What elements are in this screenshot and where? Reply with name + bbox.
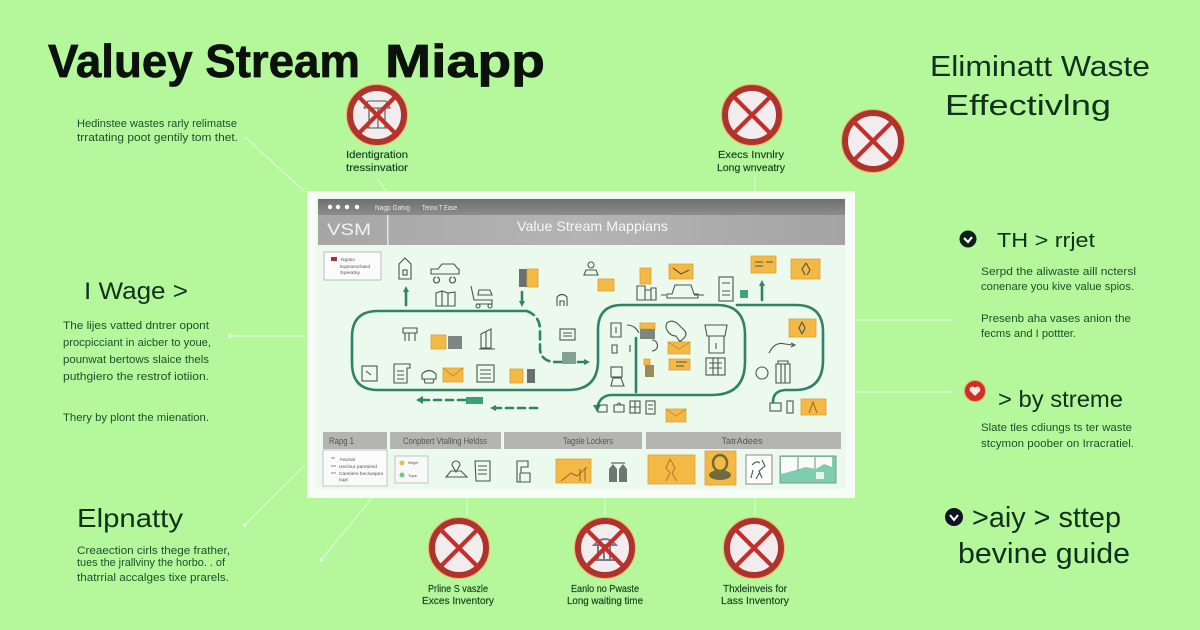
caption: prime waste: Exces Inventory: [422, 595, 495, 607]
icon: no waste bottom right: [724, 518, 784, 578]
heading: eliminate waste: Effectivlng: [945, 90, 1111, 122]
icon: no waste top left: [346, 84, 408, 146]
text block: elpnatty: Creaection cirls thege frather,: [77, 545, 230, 557]
text block: elpnatty: thatrrial accalges tixe prarels.: [77, 572, 229, 584]
caption: long waiting time: [567, 583, 643, 607]
text block: wage: procpicciant in aicber to youe,: [63, 337, 211, 349]
text block: elpnatty: [77, 545, 230, 584]
text block: top left note: [77, 118, 238, 144]
caption: less inventory: Lass Inventory: [721, 595, 790, 607]
heading: wage: I Wage >: [84, 278, 188, 305]
icon: heart badge: [964, 380, 986, 402]
table cell: key card: [395, 456, 428, 483]
table cell: key card: Weget: [408, 460, 419, 465]
table cell: list: Caretiere becrwspea: [339, 471, 384, 476]
caption: less inventory: Thxleinveis for: [723, 583, 787, 595]
icon: no waste bottom centre: [574, 518, 636, 578]
table headers: [323, 432, 841, 449]
text block: right two: [981, 422, 1134, 450]
table cell: icons: [446, 459, 627, 483]
table headers: TatrAdees: [722, 436, 763, 446]
heading: eliminate waste: [930, 51, 1150, 122]
icon: no waste bottom left: [428, 518, 490, 578]
caption: excess inventory: Execs Invnlry: [718, 149, 785, 161]
table cell: list: [323, 450, 387, 486]
heading: step by step guide: >aiy > sttep: [972, 502, 1121, 534]
heading: elpnatty: Elpnatty: [77, 503, 183, 533]
header bar: Tenno T Ease: [422, 203, 457, 212]
text block: elpnatty: tues the jrallviny the horbo. . of: [77, 557, 226, 569]
caption: less inventory: [721, 583, 790, 607]
text block: top left note: Hedinstee wastes rarly relimatse: [77, 118, 237, 130]
header bar: [318, 199, 845, 245]
caption: prime waste: [422, 583, 495, 607]
icon: no waste top right: [842, 110, 904, 172]
heading: step by step guide: [958, 502, 1130, 570]
header bar: Nagp Gatvg: [375, 203, 410, 212]
text block: right one: fecms and I pottter.: [981, 328, 1076, 340]
text block: wage: pounwat bertows slaice thels: [63, 354, 210, 366]
heading: th trjet: TH > rrjet: [997, 230, 1096, 252]
icons: left loop: [362, 328, 576, 383]
text block: right two: Slate tles cdiungs ts ter waste: [981, 422, 1132, 434]
caption: identification: [346, 149, 409, 174]
table headers: Rapg 1: [329, 436, 354, 446]
legend box: Ngaso: [341, 257, 356, 262]
text block: wage: Thery by plont the mienation.: [63, 412, 209, 424]
legend box: Eqananeclated: [340, 264, 370, 269]
icons: centre loop: [611, 319, 816, 386]
text block: top left note: trratating poot gentily tom thet.: [77, 132, 238, 144]
text block: wage: puthgiero the restrof iotiion.: [63, 371, 209, 383]
text block: right two: stcymon poober on Irracratiel.: [981, 438, 1134, 450]
caption: identification: tressinvatior: [346, 162, 409, 174]
title: [48, 35, 545, 87]
caption: long waiting time: Eanlo no Pwaste: [571, 583, 639, 595]
caption: long waiting time: Long waiting time: [567, 595, 643, 607]
text block: right one: Serpd the aliwaste aill nctersl: [981, 266, 1136, 278]
table headers: Tagsle Lockers: [563, 436, 613, 446]
heading: by streme: > by streme: [998, 386, 1123, 412]
panel: value stream map: [307, 191, 855, 498]
header bar: VSM: [327, 220, 371, 239]
table cell: list: Pneud tand: [340, 457, 355, 462]
icon: check badge: [960, 230, 976, 248]
header bar: Value Stream Mappians: [517, 218, 668, 234]
table cell: key card: Tupe: [408, 473, 418, 478]
heading: eliminate waste: Eliminatt Waste: [930, 51, 1150, 83]
text block: right one: [981, 266, 1136, 340]
text block: wage: The lijes vatted dntrer opont: [63, 320, 209, 332]
caption: identification: Identigration: [346, 149, 408, 161]
heading: step by step guide: bevine guide: [958, 538, 1130, 570]
legend box: [324, 252, 381, 280]
connector lines: [228, 137, 955, 562]
caption: excess inventory: [717, 149, 786, 174]
icon: no waste top centre: [722, 84, 782, 146]
text block: right one: conenare you kive value spios.: [981, 281, 1134, 293]
icons: lower row: [598, 399, 826, 422]
caption: excess inventory: Long wnveatry: [717, 162, 786, 174]
caption: prime waste: Prline S vaszle: [428, 583, 488, 595]
legend box: Spieatsy: [340, 270, 361, 275]
icons: upper row: [399, 256, 820, 308]
table cell: list: Ueclour paretiend: [339, 464, 378, 469]
title: Valuey Stream: [48, 35, 360, 87]
text block: right one: Presenb aha vases anion the: [981, 313, 1131, 325]
table headers: Conpbert Vtalling Heldss: [403, 436, 487, 446]
text block: wage: [63, 320, 211, 424]
icon: chevron badge: [945, 508, 963, 526]
title: Miapp: [385, 35, 545, 87]
flow: green stream loops: [352, 280, 823, 412]
table cell: feature images: [648, 451, 836, 485]
table cell: list: Iugs: [339, 477, 349, 482]
